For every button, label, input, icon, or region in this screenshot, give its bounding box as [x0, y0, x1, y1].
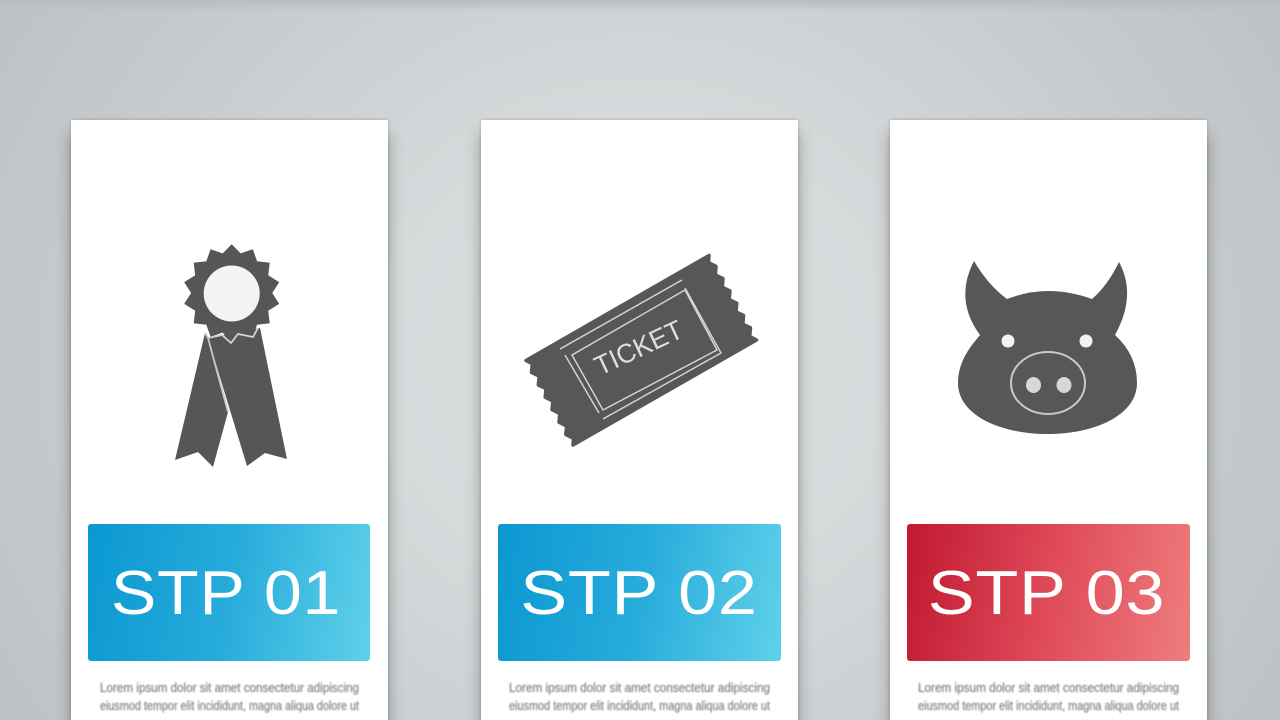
- banner: step 3: STP 03: [928, 559, 1165, 628]
- icon: ticket: TICKET: [590, 314, 688, 381]
- panel: step 3 card: [890, 120, 1207, 720]
- icon: pig face: [958, 261, 1137, 434]
- banner: step 1: [88, 524, 370, 661]
- icon: award ribbon: [175, 245, 287, 467]
- text block: step 3 description: [918, 681, 1180, 720]
- text block: step 2 description: eiusmod tempor elit incididunt, magna aliqua dolore ut: [509, 699, 770, 713]
- banner: step 2: [498, 524, 781, 661]
- text block: step 3 description: eiusmod tempor elit incididunt, magna aliqua dolore ut: [918, 699, 1179, 713]
- text block: step 2 description: [508, 681, 771, 720]
- text block: step 1 description: eiusmod tempor elit incididunt, magna aliqua dolore ut: [100, 699, 359, 713]
- banner: step 2: STP 02: [520, 559, 758, 628]
- text block: step 1 description: Lorem ipsum dolor sit amet consectetur adipiscing: [100, 681, 359, 695]
- banner: step 3: [907, 524, 1190, 661]
- panel: step 1 card: [71, 120, 388, 720]
- text block: step 3 description: Lorem ipsum dolor sit amet consectetur adipiscing: [918, 681, 1179, 695]
- banner: step 1: STP 01: [111, 559, 341, 628]
- text block: step 2 description: Lorem ipsum dolor sit amet consectetur adipiscing: [509, 681, 770, 695]
- panel: step 2 card: [481, 120, 798, 720]
- icon: ticket: [526, 256, 756, 445]
- text block: step 1 description: [100, 681, 360, 720]
